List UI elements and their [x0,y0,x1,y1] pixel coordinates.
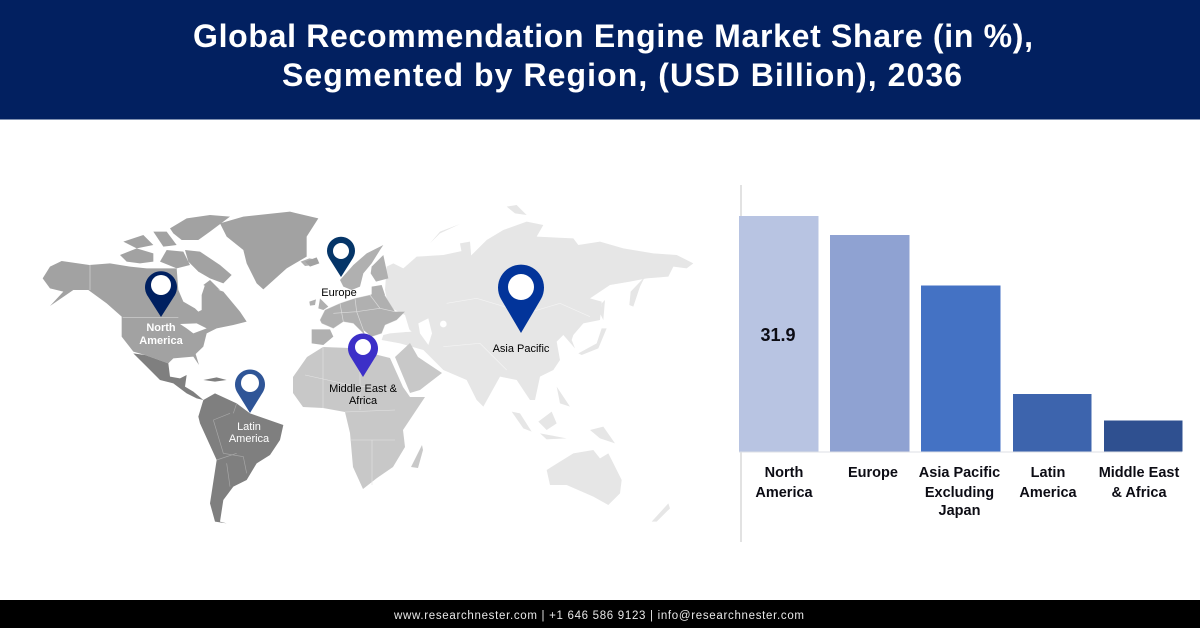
pin: Latin America [235,370,265,413]
world map [43,205,693,523]
bar: Middle East and Africa [1104,420,1182,452]
label: Asia Pacific: Asia Pacific [493,343,550,355]
label: Latin America: Latin [237,421,261,433]
axis labels: Japan [939,503,980,519]
great lakes [180,323,207,333]
label: Middle East and Africa: Middle East & [329,383,398,395]
axis labels: America [1019,485,1078,501]
label: Middle East and Africa [329,383,398,407]
pin: Asia Pacific [498,265,544,333]
header band [0,0,1200,120]
title: Global Recommendation Engine Market Share (in %), [193,18,1033,54]
label: North America: America [139,335,184,347]
seas [388,324,412,333]
bar chart [739,185,1182,542]
bar: Europe [830,235,910,452]
axis labels [755,465,1179,519]
bar: Asia Pacific Excluding Japan [921,286,1000,452]
label: North America [139,322,184,347]
region: Greenland [220,212,319,289]
axis labels: America [755,485,814,501]
label: Latin America [229,421,270,445]
axis labels: Asia Pacific [919,465,1000,481]
footer band [0,600,1200,628]
bar: Latin America [1013,394,1092,452]
axis labels: Middle East [1099,465,1179,481]
axis labels: & Africa [1111,485,1167,501]
map land shapes [43,205,693,523]
pin: Middle East and Africa [348,334,378,377]
pin: North America [145,271,177,317]
axis labels: Excluding [925,485,994,501]
axis labels: Latin [1031,465,1065,481]
axis labels: Europe [848,465,898,481]
title [193,18,1033,93]
footer contact text: www.researchnester.com | +1 646 586 9123 | info@researchnester.com [393,610,804,622]
value label: 31.9 [760,325,796,345]
title: Segmented by Region, (USD Billion), 2036 [282,57,962,93]
bar: North America [739,216,818,452]
label: Middle East and Africa: Africa [349,395,378,407]
label: Europe: Europe [321,287,357,299]
region: Europe [301,245,405,345]
region: Latin America [133,353,283,523]
axis labels: North [765,465,803,481]
region: Middle East and Africa [293,343,442,489]
label: Latin America: America [229,433,270,445]
pin: Europe [327,237,355,277]
label: North America: North [146,322,176,334]
region: North America [43,215,247,365]
region: Asia Pacific [382,205,693,522]
